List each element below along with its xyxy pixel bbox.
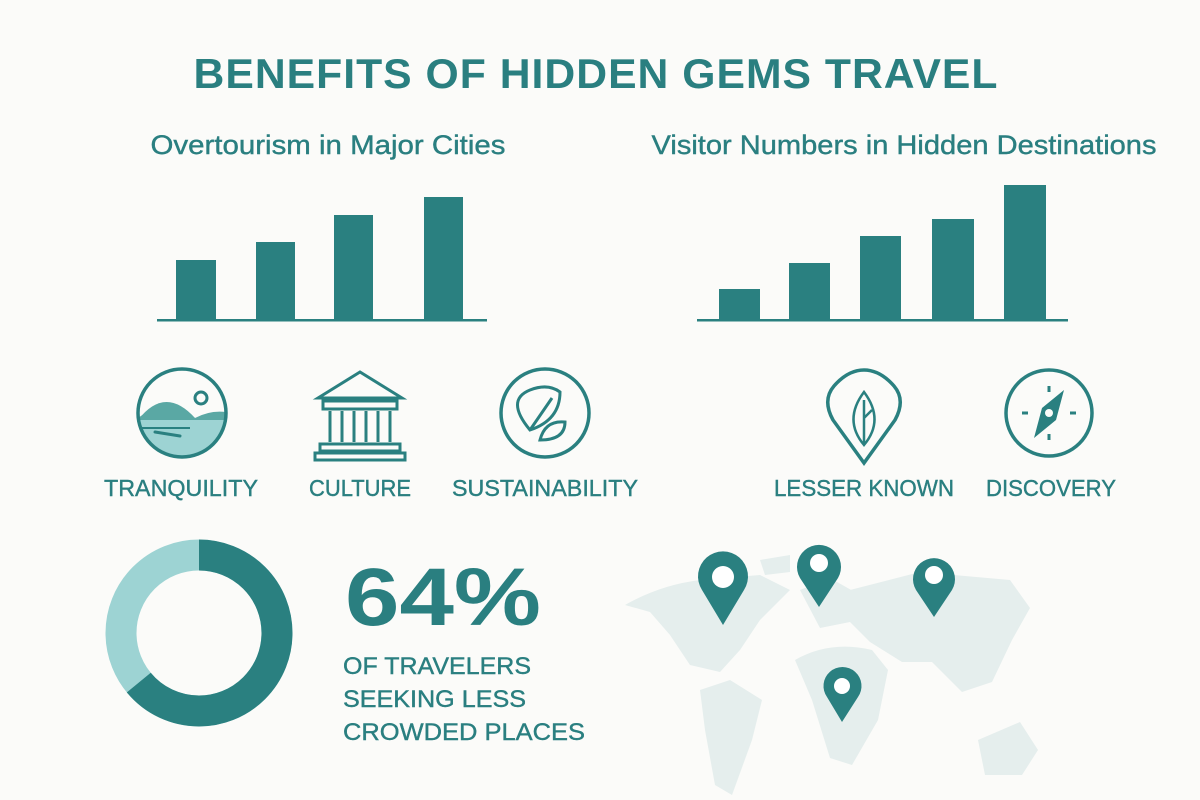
chart: overtourism in major cities: Overtourism in Major Cities [150,130,506,160]
world map [625,555,1038,795]
icon: lesser known [774,370,954,501]
stat: 64%: 64% [345,552,541,643]
stat: 64%: SEEKING LESS [343,686,526,713]
chart: overtourism in major cities [150,130,506,322]
stat: 64%: OF TRAVELERS [343,653,531,680]
chart: visitor numbers in hidden destinations [652,130,1156,322]
donut chart [121,555,277,711]
icon: sustainability [452,369,638,501]
stat: 64%: CROWDED PLACES [343,719,585,746]
icon: culture [309,372,411,501]
icon: tranquility: TRANQUILITY [104,475,258,501]
icon: culture: CULTURE [309,475,411,501]
chart: visitor numbers in hidden destinations: Visitor Numbers in Hidden Destinations [652,130,1156,160]
icon: discovery [986,370,1116,501]
icon: sustainability: SUSTAINABILITY [452,475,638,501]
icon: tranquility [104,369,258,501]
icon: discovery: DISCOVERY [986,475,1116,501]
title: BENEFITS OF HIDDEN GEMS TRAVEL [194,50,998,97]
map pins [698,545,955,722]
icon: lesser known: LESSER KNOWN [774,475,954,501]
stat: 64% [343,552,585,746]
